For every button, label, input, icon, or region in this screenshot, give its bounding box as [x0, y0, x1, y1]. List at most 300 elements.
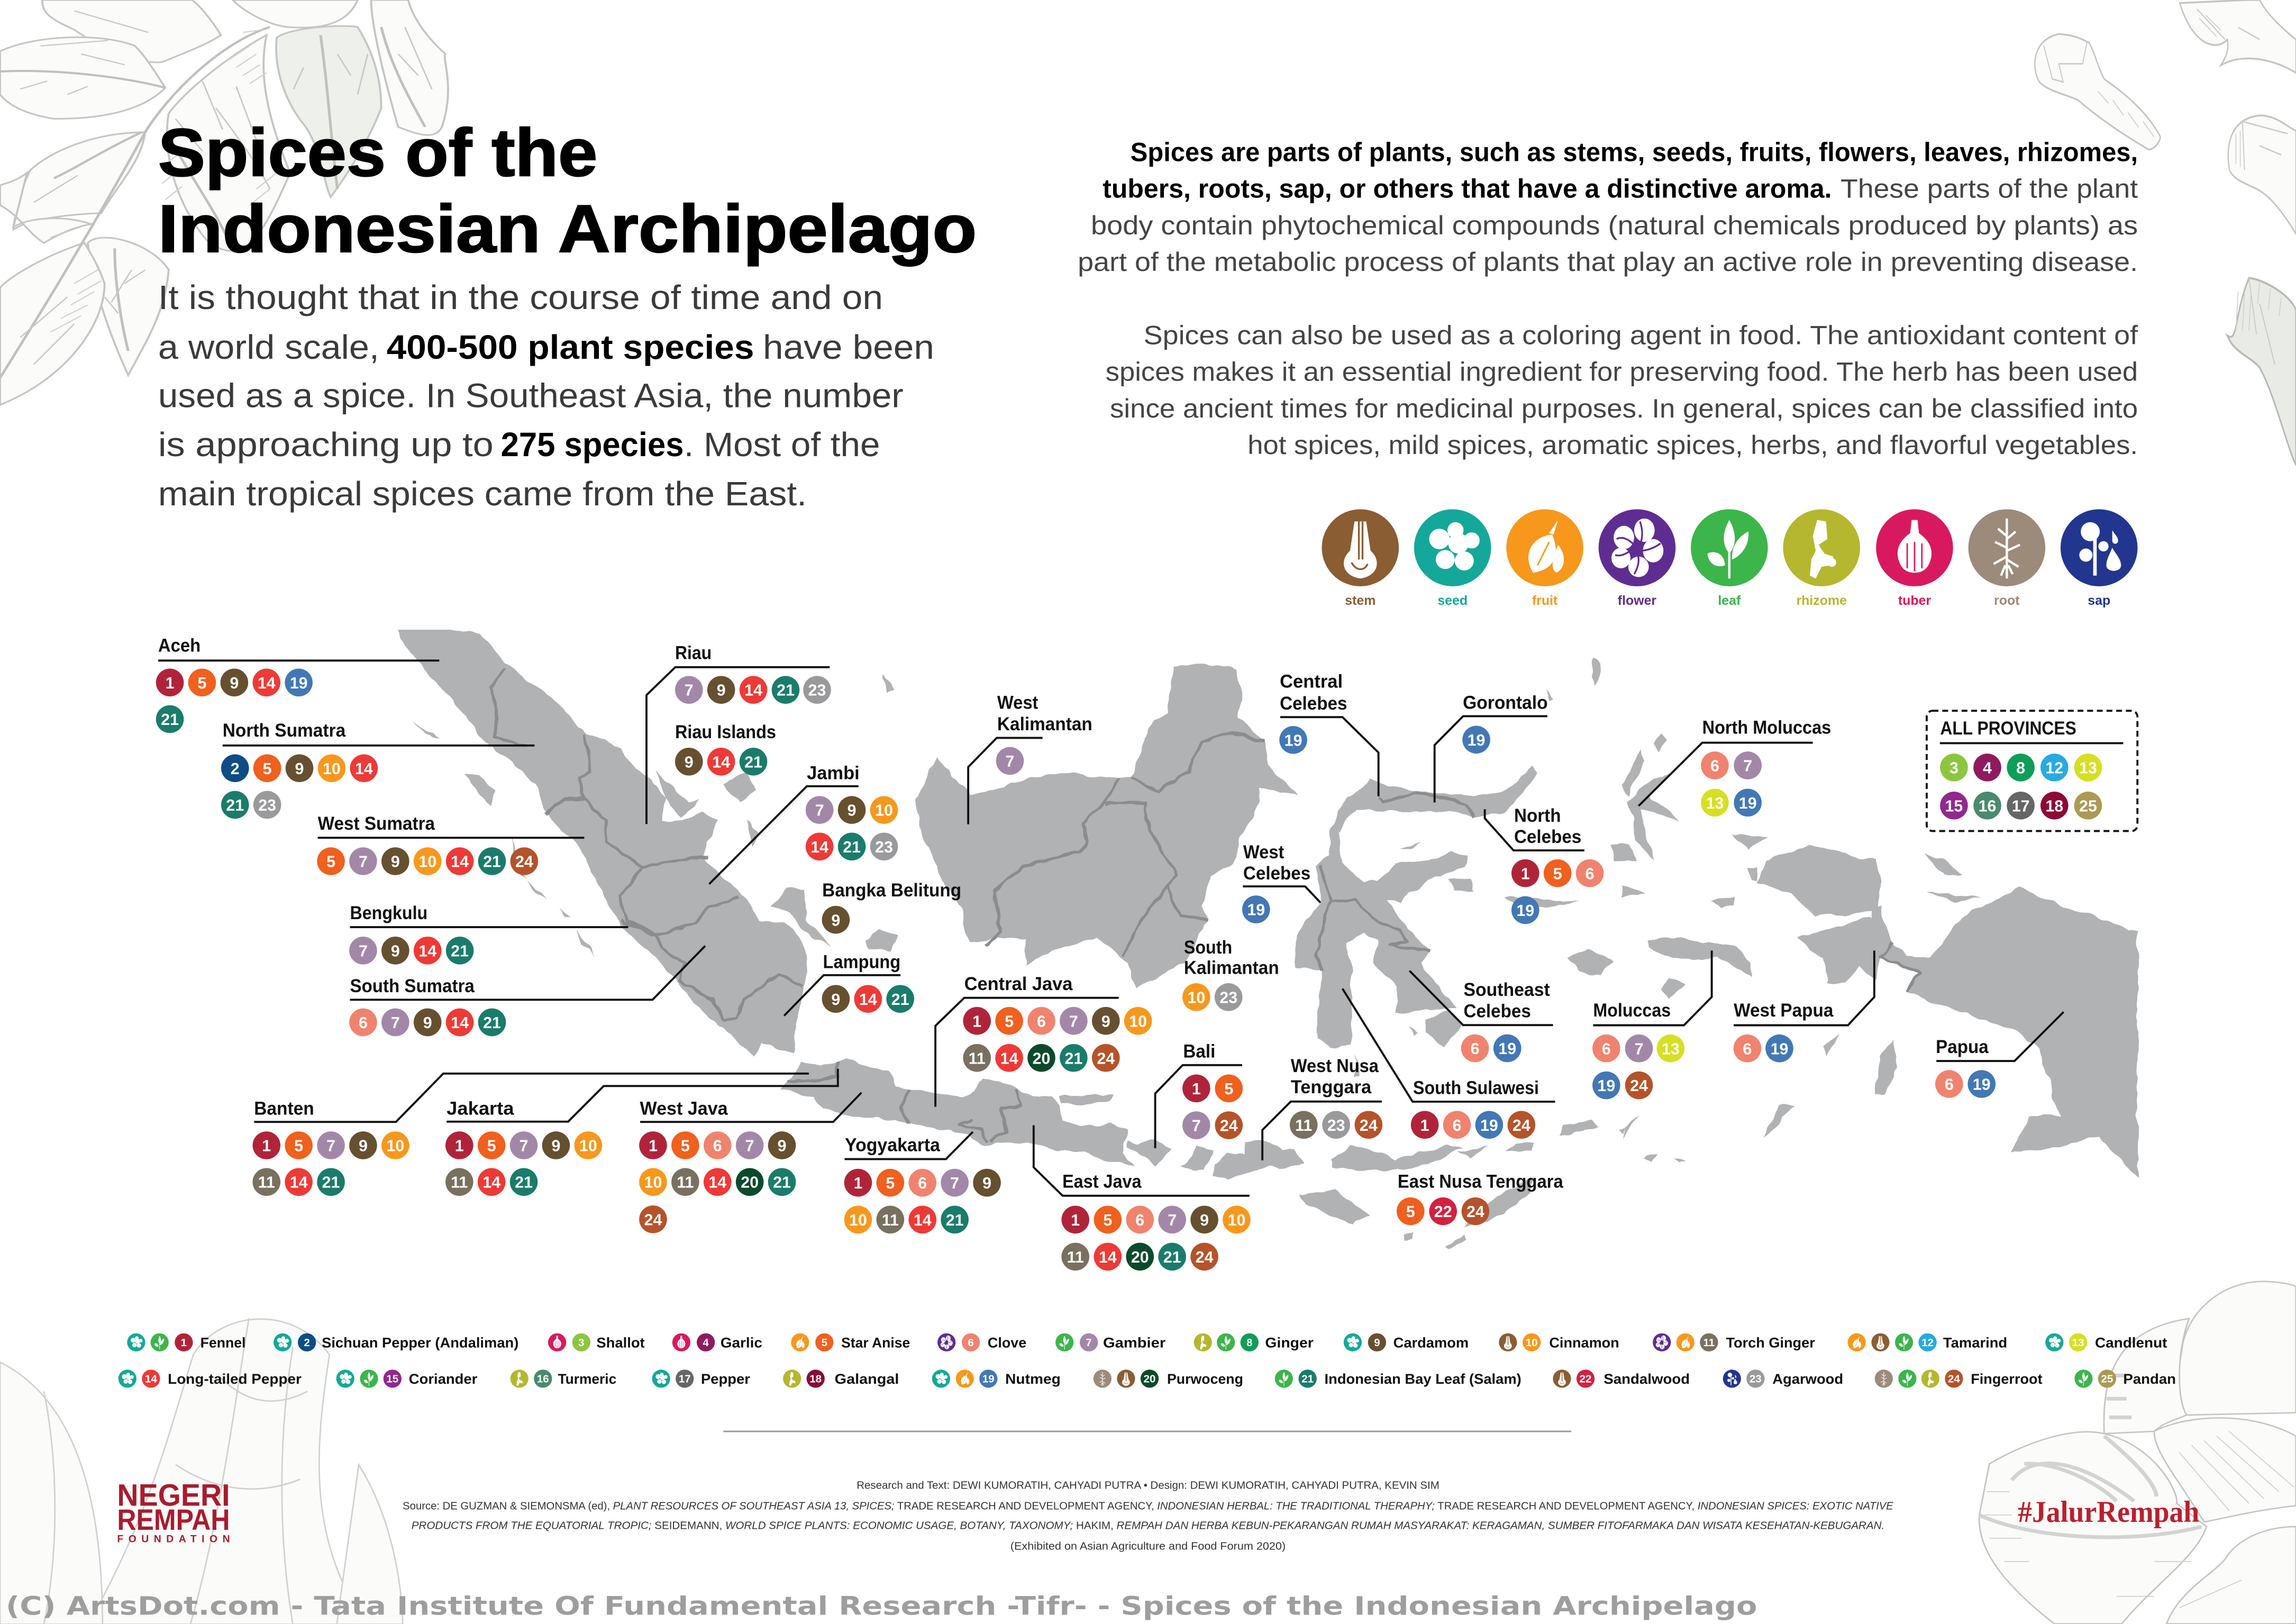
province: West Sumatra: West Sumatra — [318, 813, 435, 834]
icon: rhizome: rhizome — [1796, 593, 1847, 608]
credits and sources: PRODUCTS FROM THE EQUATORIAL TROPIC; SEIDEMANN, WORLD SPICE PLANTS: ECONOMIC USAGE, BOTANY, TAXONOMY; HAKIM, REMPAH DAN HERBA KEBUN-PEKARANGAN RUMAH MASYARAKAT: KERAGAMAN, SUMBER FITOFARMAKA DAN WISATA KESEHATAN-KEBUGARAN. — [412, 1520, 1884, 1532]
Kalimantan — [917, 664, 1299, 988]
spice: Nutmeg: 19 — [982, 1373, 995, 1385]
province: Riau: Riau — [675, 643, 712, 664]
province: West Nusa Tenggara: 11 — [1295, 1117, 1312, 1135]
spice: Fennel — [127, 1333, 245, 1351]
spice: Sichuan Pepper — [274, 1333, 518, 1351]
spice: Clove — [937, 1333, 1026, 1351]
province: Jambi: Jambi — [807, 763, 860, 784]
spice: Tamarind: Tamarind — [1943, 1335, 2007, 1350]
province: East Java: 14 — [1099, 1248, 1117, 1266]
spice: Long-tailed Pepper: 14 — [145, 1373, 157, 1385]
province: Banten: 14 — [290, 1174, 308, 1192]
spice: Turmeric: 16 — [537, 1373, 549, 1385]
province: West Java: 20 — [741, 1174, 759, 1192]
province: Bali: 1 — [1192, 1080, 1201, 1098]
province: Lampung: 21 — [891, 991, 909, 1009]
province: Riau: 14 — [744, 682, 762, 700]
province: Papua: 19 — [1973, 1076, 1991, 1094]
province: East Nusa Tenggara: East Nusa Tenggara — [1398, 1172, 1563, 1192]
province: Bangka Belitung — [822, 880, 961, 934]
spice: Pepper — [652, 1369, 750, 1388]
province: Gorontalo: 19 — [1468, 731, 1485, 749]
province: West Sumatra: 14 — [451, 853, 469, 871]
Java and Madura — [780, 1058, 1133, 1166]
province: North Celebes: 6 — [1586, 865, 1595, 883]
province: South Kalimantan — [1182, 937, 1279, 1011]
province: East Java: 9 — [1200, 1211, 1209, 1229]
icon: fruit — [1506, 509, 1583, 608]
icon: sap — [2061, 509, 2138, 608]
province: East Java: 1 — [1071, 1211, 1080, 1229]
province: South Sulawesi: 19 — [1480, 1117, 1498, 1135]
province: West Java: 14 — [708, 1174, 726, 1192]
province: Riau Islands: 14 — [712, 753, 730, 771]
province: Bali — [1155, 1041, 1243, 1148]
province: Gorontalo: Gorontalo — [1463, 693, 1548, 713]
panel: all provinces: 4 — [1983, 759, 1992, 777]
province: Central Java: 20 — [1033, 1049, 1050, 1067]
province: Banten: 21 — [322, 1174, 340, 1192]
spice: Pepper: Pepper — [701, 1371, 750, 1387]
panel: all provinces: 25 — [2079, 797, 2097, 815]
description text block: spices makes it an essential ingredient for preserving food. The herb has been used — [1106, 357, 2138, 387]
spice: Tamarind — [1848, 1333, 2007, 1351]
description text block: part of the metabolic process of plants that play an active role in preventing disease. — [1078, 247, 2138, 277]
province: Central Java: Central Java — [964, 974, 1073, 994]
province: North Sumatra: 2 — [231, 760, 240, 778]
province: Riau: 23 — [808, 682, 826, 700]
province: Bengkulu: 9 — [391, 942, 400, 960]
icon: leaf — [1691, 509, 1768, 608]
province: North Celebes: 1 — [1521, 865, 1530, 883]
spice: Gambier: 7 — [1086, 1337, 1092, 1349]
province: Banten: Banten — [254, 1098, 314, 1119]
intro text block: have been — [763, 329, 934, 366]
spice: Gambier — [1055, 1333, 1165, 1351]
province: Banten: 5 — [294, 1137, 303, 1155]
spice: Shallot — [548, 1333, 645, 1351]
province: Banten: 7 — [326, 1137, 335, 1155]
province: North Moluccas: 7 — [1743, 757, 1752, 775]
watermark: (C) ArtsDot.com - Tata Institute Of Fundamental Research -Tifr- - Spices of the Indonesian Archipelago — [6, 1592, 1757, 1621]
province: Southeast Celebes: 6 — [1471, 1040, 1480, 1058]
icon: stem — [1322, 509, 1399, 608]
province: Papua: 6 — [1945, 1076, 1954, 1094]
Sumatra — [394, 620, 807, 1056]
spice: Clove: 6 — [968, 1337, 974, 1349]
province: Aceh: 19 — [290, 674, 308, 692]
province: Bali: Bali — [1183, 1041, 1215, 1062]
icon: rhizome — [1783, 509, 1860, 608]
spice: Sandalwood: Sandalwood — [1603, 1371, 1690, 1387]
province: Banten: 11 — [258, 1174, 275, 1192]
province: West Nusa Tenggara: Tenggara — [1291, 1077, 1372, 1097]
province: Papua — [1935, 1012, 2064, 1098]
province: Jambi: 7 — [815, 802, 824, 820]
province: West Sumatra: 9 — [391, 853, 400, 871]
spice: Cinnamon: 10 — [1526, 1337, 1538, 1349]
Sulawesi — [1295, 766, 1537, 1047]
province: Moluccas: 24 — [1630, 1077, 1648, 1095]
province: Aceh: 5 — [197, 674, 206, 692]
province: Yogyakarta: 9 — [982, 1174, 991, 1192]
province: West Java: 1 — [649, 1137, 658, 1155]
panel: all provinces: 16 — [1979, 797, 1996, 815]
description text block: tubers, roots, sap, or others that have a distinctive aroma. — [1103, 174, 1832, 204]
province: West Java — [639, 1093, 861, 1233]
intro text block: 275 species — [501, 426, 684, 464]
spice: Sandalwood: 22 — [1580, 1373, 1591, 1385]
province: East Java: 21 — [1163, 1248, 1181, 1266]
province: West Celebes — [1242, 842, 1320, 923]
spice: Ginger: Ginger — [1265, 1335, 1314, 1350]
province: Bengkulu: 14 — [418, 942, 436, 960]
province: West Kalimantan: Kalimantan — [997, 714, 1092, 734]
province: North Sumatra: 23 — [258, 796, 276, 814]
description text block: since ancient times for medicinal purposes. In general, spices can be classified into — [1110, 394, 2138, 423]
spice: Ginger: 8 — [1246, 1337, 1253, 1349]
province: Aceh: 14 — [258, 674, 276, 692]
spice: Candlenut: 13 — [2072, 1337, 2084, 1349]
spice: Garlic: Garlic — [721, 1335, 762, 1350]
province: West Celebes: 19 — [1247, 901, 1265, 919]
province: North Celebes: 5 — [1553, 865, 1562, 883]
spice: Agarwood: Agarwood — [1772, 1371, 1843, 1387]
intro text block: used as a spice. In Southeast Asia, the number — [158, 377, 904, 414]
province: Bengkulu — [349, 903, 628, 965]
icon: seed: seed — [1437, 593, 1468, 608]
spice: Long-tailed Pepper — [119, 1369, 302, 1388]
icon: seed — [1414, 509, 1491, 608]
spice: Sandalwood — [1553, 1369, 1690, 1388]
description text block — [1078, 137, 2138, 460]
province: South Sumatra: 7 — [391, 1014, 400, 1032]
spice: Nutmeg: Nutmeg — [1005, 1371, 1061, 1387]
map of Indonesia — [394, 620, 2138, 1249]
spice: Long-tailed Pepper: Long-tailed Pepper — [168, 1371, 302, 1387]
province: North Moluccas: 13 — [1706, 794, 1724, 812]
province: West Papua: West Papua — [1734, 1000, 1834, 1021]
province: Riau Islands: 9 — [685, 753, 694, 771]
spice: Clove: Clove — [988, 1335, 1026, 1350]
hashtag: #JalurRempah — [2018, 1495, 2199, 1529]
province: West Java: 5 — [681, 1137, 690, 1155]
spice: Fingerroot: 24 — [1948, 1373, 1960, 1385]
spice: Cinnamon — [1499, 1333, 1619, 1351]
province: Jambi: 21 — [843, 838, 861, 856]
spice: Gambier: Gambier — [1103, 1335, 1165, 1350]
spice: Garlic — [672, 1333, 762, 1351]
province: South Sulawesi: 1 — [1420, 1117, 1429, 1135]
province: Jambi: 14 — [810, 838, 828, 856]
icon: stem: stem — [1345, 593, 1375, 608]
intro text block: is approaching up to — [158, 426, 494, 464]
province: Riau: 21 — [777, 682, 795, 700]
background sketch: leaves top left — [0, 0, 448, 405]
spice: Agarwood — [1723, 1369, 1843, 1388]
background sketch: clove buds top right — [2035, 0, 2296, 465]
province: Yogyakarta: 1 — [853, 1174, 862, 1192]
panel: all provinces — [1927, 711, 2137, 831]
province: Moluccas: 13 — [1662, 1040, 1680, 1058]
title: Indonesian Archipelago — [158, 191, 977, 266]
province: Moluccas — [1592, 950, 1712, 1099]
panel: all provinces: 3 — [1949, 759, 1958, 777]
icon: leaf: leaf — [1718, 593, 1741, 608]
spice: Fingerroot — [1875, 1369, 2043, 1388]
province: South Sulawesi: 24 — [1513, 1117, 1530, 1135]
province: Central Celebes: Celebes — [1280, 693, 1347, 714]
spice: Indonesian Bay Leaf — [1275, 1369, 1521, 1388]
province: Bali: 5 — [1224, 1080, 1233, 1098]
province: Southeast Celebes: Southeast — [1463, 979, 1550, 1000]
province: Yogyakarta: 7 — [950, 1174, 959, 1192]
province: North Sumatra: 10 — [323, 760, 341, 778]
spice: Cinnamon: Cinnamon — [1549, 1335, 1619, 1350]
province: South Sumatra: South Sumatra — [350, 976, 475, 996]
province: East Java: East Java — [1062, 1172, 1142, 1192]
province: Bali: 7 — [1192, 1117, 1201, 1135]
logo: Negeri Rempah Foundation: FOUNDATION — [117, 1534, 230, 1545]
province: Riau: 7 — [685, 682, 694, 700]
province: Moluccas: Moluccas — [1593, 1000, 1671, 1021]
spice: Purwoceng: Purwoceng — [1167, 1371, 1243, 1387]
spice: Cardamom — [1344, 1333, 1469, 1351]
province: North Moluccas: 19 — [1739, 794, 1757, 812]
province: West Celebes: Celebes — [1243, 863, 1310, 884]
panel: all provinces: 13 — [2079, 759, 2097, 777]
province: Riau: 9 — [717, 682, 726, 700]
spice: Star Anise: 5 — [822, 1337, 827, 1349]
icon: fruit: fruit — [1532, 593, 1557, 608]
province: East Java: 5 — [1103, 1211, 1112, 1229]
province: West Java: 9 — [778, 1137, 787, 1155]
credits and sources: Research and Text: DEWI KUMORATIH, CAHYADI PUTRA • Design: DEWI KUMORATIH, CAHYADI PUTRA, KEVIN SIM — [857, 1480, 1439, 1492]
province: Lampung — [784, 952, 914, 1016]
province: Jambi: 23 — [875, 838, 893, 856]
province: Yogyakarta: 21 — [946, 1211, 964, 1229]
province: Bengkulu: 7 — [359, 942, 368, 960]
province: West Nusa Tenggara: West Nusa — [1291, 1056, 1379, 1076]
province: East Nusa Tenggara: 22 — [1434, 1203, 1452, 1221]
icon: root — [1969, 509, 2045, 608]
province: Jambi — [709, 763, 898, 884]
province: Central Java — [935, 974, 1152, 1107]
spice: Purwoceng — [1094, 1369, 1243, 1388]
province: Bali: 24 — [1220, 1117, 1238, 1135]
spice: Galangal: 18 — [809, 1373, 822, 1385]
spice: Torch Ginger — [1653, 1333, 1815, 1351]
province: Riau Islands — [675, 722, 776, 776]
spice: Galangal — [783, 1369, 899, 1388]
intro text block: 400-500 plant species — [387, 329, 754, 366]
province: Moluccas: 19 — [1597, 1077, 1615, 1095]
intro text block: a world scale, — [158, 329, 379, 366]
province: West Java: 7 — [745, 1137, 754, 1155]
logo: Negeri Rempah Foundation — [117, 1478, 230, 1545]
icon: tuber — [1876, 509, 1953, 608]
province: Gorontalo — [1435, 693, 1548, 803]
spice: Star Anise: Star Anise — [841, 1335, 910, 1350]
icon: root: root — [1994, 593, 2020, 608]
province: West Sumatra: 5 — [326, 853, 335, 871]
province: West Java: 6 — [713, 1137, 722, 1155]
province: North Sumatra: North Sumatra — [223, 720, 346, 741]
spice index list — [119, 1333, 2176, 1388]
province: West Celebes: West — [1243, 842, 1284, 863]
province: West Java: West Java — [640, 1098, 728, 1119]
province: Bangka Belitung: 9 — [831, 911, 840, 929]
province: Moluccas: 6 — [1602, 1040, 1611, 1058]
Sumatra islands — [412, 674, 898, 956]
province: Jakarta: 9 — [551, 1137, 560, 1155]
province: East Nusa Tenggara: 5 — [1406, 1203, 1415, 1221]
province: Lampung: 14 — [859, 991, 877, 1009]
province: South Kalimantan: 10 — [1187, 988, 1205, 1006]
logo: Negeri Rempah Foundation: NEGERI — [117, 1478, 230, 1512]
province: Banten: 9 — [359, 1137, 368, 1155]
province: Yogyakarta: 5 — [886, 1174, 895, 1192]
intro text block — [158, 279, 934, 513]
panel: all provinces: 12 — [2045, 759, 2063, 777]
spice: Purwoceng: 20 — [1144, 1373, 1155, 1385]
province: East Java: 10 — [1228, 1211, 1245, 1229]
province: South Sumatra — [349, 946, 705, 1036]
spice: Torch Ginger: 11 — [1703, 1337, 1715, 1349]
description text block: body contain phytochemical compounds (natural chemicals produced by plants) as — [1091, 211, 2138, 240]
province: North Moluccas — [1638, 718, 1831, 816]
title: Spices of the — [158, 115, 597, 190]
province: Yogyakarta: Yogyakarta — [845, 1135, 941, 1156]
icon: flower — [1599, 509, 1675, 608]
spice: Coriander — [336, 1369, 477, 1388]
province: West Java: 21 — [773, 1174, 791, 1192]
description text block: Spices are parts of plants, such as stems, seeds, fruits, flowers, leaves, rhizomes, — [1131, 137, 2138, 167]
province: Aceh: 21 — [161, 711, 179, 729]
credits and sources — [403, 1480, 1893, 1552]
panel: all provinces: 18 — [2045, 797, 2063, 815]
province: West Papua — [1734, 950, 1874, 1063]
panel: all provinces: 17 — [2012, 797, 2030, 815]
spice: Fennel: Fennel — [201, 1335, 245, 1350]
logo: Negeri Rempah Foundation: REMPAH — [117, 1503, 230, 1536]
province: Aceh: Aceh — [158, 636, 201, 656]
spice: Agarwood: 23 — [1750, 1373, 1762, 1385]
spice: Indonesian Bay Leaf: Indonesian Bay Leaf (Salam) — [1325, 1371, 1521, 1387]
Papua — [1710, 835, 2138, 1179]
province: Jakarta: 10 — [579, 1137, 597, 1155]
spice: Candlenut — [2045, 1333, 2167, 1351]
province: Central Celebes: Central — [1280, 672, 1343, 692]
panel: all provinces: ALL PROVINCES — [1940, 718, 2076, 739]
province: Riau Islands: Riau Islands — [675, 722, 776, 742]
spice: Ginger — [1194, 1333, 1314, 1351]
province: West Sumatra: 24 — [515, 853, 533, 871]
province: Jambi: 10 — [875, 802, 893, 820]
province: Central Java: 11 — [969, 1049, 986, 1067]
province: West Kalimantan: 7 — [1006, 752, 1014, 770]
province: East Nusa Tenggara — [1397, 1172, 1563, 1225]
province: Central Java: 10 — [1129, 1012, 1147, 1030]
province: Southeast Celebes — [1409, 971, 1553, 1062]
province: West Papua: 19 — [1771, 1040, 1788, 1058]
province: North Moluccas: North Moluccas — [1702, 718, 1831, 738]
Maluku islands — [1567, 732, 1898, 1139]
spice: Candlenut: Candlenut — [2095, 1335, 2167, 1350]
province: South Kalimantan: 23 — [1219, 988, 1237, 1006]
province: West Sumatra — [317, 813, 584, 875]
province: South Sulawesi: South Sulawesi — [1413, 1078, 1539, 1099]
spice: Turmeric: Turmeric — [558, 1371, 616, 1387]
province: Central Java: 6 — [1037, 1012, 1046, 1030]
description text block: hot spices, mild spices, aromatic spices, herbs, and flavorful vegetables. — [1247, 430, 2138, 460]
spice: Torch Ginger: Torch Ginger — [1726, 1335, 1815, 1350]
province: Southeast Celebes: 19 — [1498, 1040, 1516, 1058]
province: Bengkulu: Bengkulu — [350, 903, 427, 923]
spice: Pandan — [2074, 1369, 2176, 1388]
province: Central Java: 5 — [1005, 1012, 1014, 1030]
province: Banten: 1 — [262, 1137, 271, 1155]
province: West Nusa Tenggara: 23 — [1327, 1117, 1345, 1135]
province: Yogyakarta: 11 — [882, 1211, 899, 1229]
spice: Indonesian Bay Leaf: 21 — [1301, 1373, 1314, 1385]
province: East Java: 7 — [1168, 1211, 1177, 1229]
province: Central Java: 9 — [1101, 1012, 1110, 1030]
background sketch: nutmeg bottom right — [1979, 1282, 2296, 1624]
spice: Pandan: 25 — [2101, 1373, 2113, 1385]
province: Jakarta: 21 — [515, 1174, 533, 1192]
province: Jakarta: 11 — [451, 1174, 468, 1192]
province: North Celebes: 19 — [1516, 902, 1534, 920]
province: North Sumatra: 9 — [295, 760, 304, 778]
province: North Moluccas: 6 — [1710, 757, 1719, 775]
spice: Garlic: 4 — [703, 1337, 709, 1349]
province: West Kalimantan — [968, 693, 1092, 824]
province: Banten — [252, 1074, 809, 1196]
province: North Celebes: North — [1514, 805, 1561, 826]
Lesser Sunda islands — [1127, 1120, 1687, 1249]
province: Jakarta: 5 — [487, 1137, 496, 1155]
plant part legend — [1322, 509, 2138, 608]
spice: Turmeric — [511, 1369, 616, 1388]
province: East Nusa Tenggara: 24 — [1466, 1203, 1484, 1221]
province: Jakarta: Jakarta — [447, 1098, 514, 1119]
province: Yogyakarta: 10 — [849, 1211, 867, 1229]
province: Jakarta — [445, 1069, 838, 1196]
province: South Sulawesi — [1343, 988, 1555, 1139]
province: Central Java: 7 — [1069, 1012, 1078, 1030]
province: Riau — [646, 643, 831, 824]
icon: flower: flower — [1618, 593, 1656, 608]
province: Jambi: 9 — [848, 802, 857, 820]
province: North Sumatra: 5 — [263, 760, 272, 778]
province: West Nusa Tenggara: 24 — [1360, 1117, 1378, 1135]
spice: Sichuan Pepper: 2 — [304, 1337, 310, 1349]
province: North Sumatra — [221, 720, 534, 819]
province: Jakarta: 14 — [482, 1174, 500, 1192]
spice: Shallot: Shallot — [596, 1335, 645, 1350]
province: Yogyakarta: 6 — [918, 1174, 927, 1192]
province: West Sumatra: 10 — [418, 853, 436, 871]
province: West Java: 10 — [644, 1174, 662, 1192]
spice: Cardamom: Cardamom — [1393, 1335, 1469, 1350]
province: Lampung: 9 — [831, 991, 840, 1009]
province: North Sumatra: 14 — [355, 760, 373, 778]
province: Banten: 10 — [386, 1137, 404, 1155]
spice: Tamarind: 12 — [1921, 1337, 1934, 1349]
